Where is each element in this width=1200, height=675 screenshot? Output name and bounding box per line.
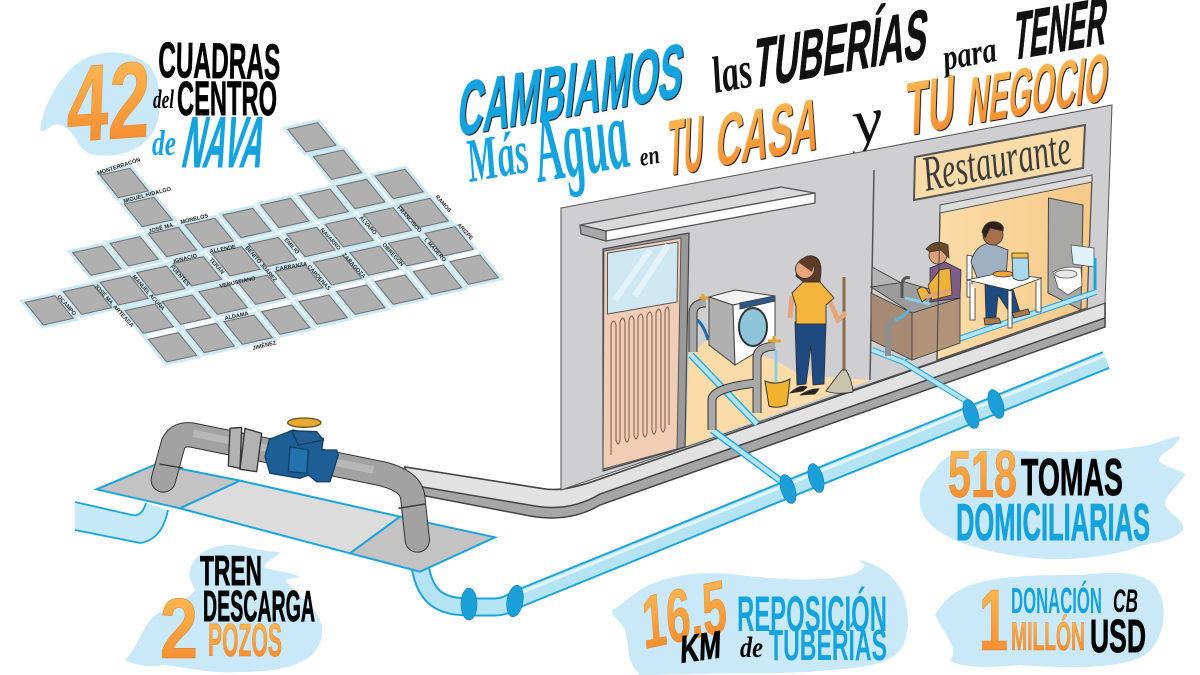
label de: de	[740, 631, 763, 664]
street names: BENITO JUÁREZ	[243, 245, 279, 284]
label CB: CB	[1113, 583, 1138, 619]
street names: JOSÉ MA. ARTEAGA	[93, 282, 136, 329]
door	[603, 233, 689, 471]
street names: CARRANZA	[275, 262, 308, 273]
flange	[228, 427, 262, 472]
street names	[56, 155, 474, 352]
restaurant sign	[914, 118, 1085, 202]
curb band running to valve	[405, 303, 1105, 518]
street names: FRANCISCO	[396, 205, 423, 235]
stat: 16.5 km reposición de tuberías: REPOSICIÓN	[737, 586, 887, 642]
gray faucet pipes	[693, 294, 781, 430]
cook washing dishes	[917, 242, 961, 302]
stat: 42 cuadras del centro de Nava	[40, 32, 281, 183]
text: NAVA	[177, 103, 274, 183]
street names: ZARAGOZA	[341, 252, 366, 280]
stat: 518 tomas domiciliarias	[920, 437, 1185, 559]
text: DESCARGA	[203, 582, 315, 631]
label km: KM	[680, 623, 722, 672]
building wall	[561, 105, 1112, 490]
text: CUADRAS	[158, 32, 281, 90]
floor pipe inner	[872, 292, 1096, 404]
stat: 1 millón usd donación CB	[935, 572, 1164, 669]
handwheel	[288, 418, 321, 427]
street names: ALLENDE	[209, 244, 237, 255]
street names: MIGUEL HIDALGO	[123, 186, 172, 205]
restaurant section	[871, 118, 1096, 404]
label de: de	[152, 123, 176, 163]
title: TU	[666, 98, 705, 193]
number 518: 518	[948, 437, 1017, 511]
title: Más	[460, 118, 533, 196]
street names: OCAMPO	[56, 294, 77, 318]
street names: MORELOS	[180, 213, 209, 226]
toilet	[1053, 245, 1095, 295]
street names: JOSÉ MA.	[147, 220, 176, 235]
street names: JIMÉNEZ	[252, 338, 278, 352]
restaurant sign: Restaurante	[917, 118, 1075, 202]
number 2: 2	[160, 582, 198, 675]
title: Agua	[522, 78, 636, 204]
stat: 1 millón usd donación CB: MILLÓN	[1011, 613, 1085, 659]
street names: FUENTES	[169, 264, 191, 288]
label tuberías: TUBERÍAS	[769, 620, 887, 670]
opening left edge	[937, 212, 940, 360]
water splash blob	[40, 52, 160, 156]
house section	[580, 187, 868, 487]
street names: TERÁN	[208, 257, 226, 276]
number 42: 42	[65, 38, 152, 165]
divider wall line	[870, 170, 874, 380]
seated customer	[967, 222, 1042, 328]
street names: RAMOS	[434, 194, 452, 214]
floor pipe in restaurant	[872, 292, 1096, 404]
valve and well discharge train	[97, 418, 495, 572]
title: y	[840, 83, 889, 159]
street names: ALDAMA	[224, 311, 249, 322]
woman with mop	[790, 256, 853, 395]
stat: 42 cuadras del centro de Nava: CENTRO	[177, 73, 277, 126]
street names: MONTERRACÓN	[96, 155, 141, 177]
title	[454, 0, 1112, 204]
label del: del	[153, 85, 175, 114]
title: TU	[904, 59, 957, 152]
window interior	[937, 178, 1092, 360]
window awning	[940, 175, 1092, 213]
street names: ARIZPE	[456, 222, 474, 242]
stat: 16.5 km reposición de tuberías	[612, 560, 908, 675]
left buried pipe	[75, 502, 168, 543]
street names: ÁLVARO	[358, 215, 378, 237]
label tren: TREN	[200, 547, 262, 594]
street names: I. MADERO	[423, 237, 447, 264]
room floor	[686, 338, 868, 446]
interior door	[1048, 198, 1083, 310]
street names: NAVARRO	[319, 227, 342, 252]
inner pipe fill	[691, 355, 789, 487]
number 16.5: 16.5	[639, 564, 729, 665]
street names: OBREGÓN	[381, 241, 406, 268]
water splash blob	[612, 560, 908, 675]
main water pipe and couplings	[418, 355, 1106, 620]
street network and blocks	[25, 123, 498, 362]
street names: IGNACIO	[173, 253, 198, 265]
street map of 42 blocks	[25, 123, 498, 362]
water splash blob	[125, 545, 322, 672]
water splash blob	[920, 437, 1185, 559]
title: para	[937, 29, 1000, 78]
gate valve body	[265, 430, 338, 482]
gray pipe	[159, 433, 425, 540]
bucket	[765, 379, 790, 407]
street names: EMILIO	[283, 237, 300, 256]
street names: CÁRDENAS	[306, 264, 332, 292]
label USD: USD	[1090, 610, 1146, 662]
concrete slab	[97, 464, 495, 572]
stat: tren descarga 2 pozos	[125, 545, 322, 675]
blue water pipes in house	[691, 355, 789, 487]
number 1: 1	[979, 572, 1008, 669]
street names: VENUSTIANO	[219, 276, 257, 290]
awning	[580, 187, 815, 241]
stat: tren descarga 2 pozos: POZOS	[208, 614, 282, 666]
counter with sink	[871, 267, 960, 360]
street names: MANUEL ACUÑA	[131, 274, 166, 312]
title: CASA	[712, 81, 824, 183]
title: las	[707, 42, 756, 105]
washing machine	[709, 290, 775, 365]
title: en	[637, 140, 662, 172]
water splash blob	[935, 573, 1164, 667]
